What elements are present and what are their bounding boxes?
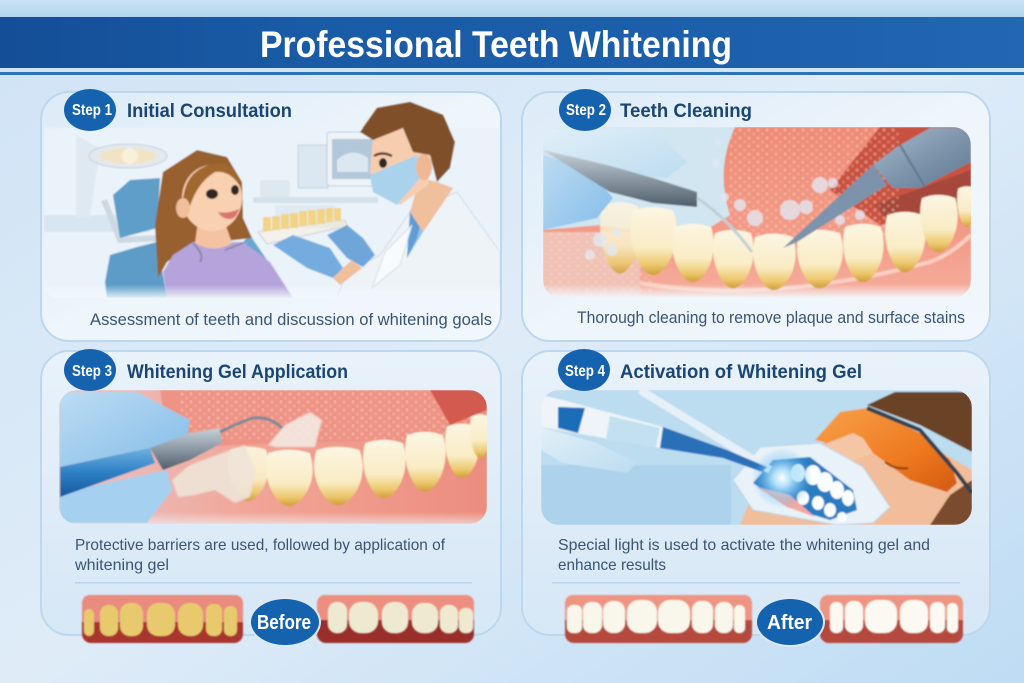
gel foam xyxy=(172,412,322,503)
step badge 2 xyxy=(559,89,611,131)
gel applicator xyxy=(60,418,282,497)
lower gum swoosh xyxy=(640,235,971,290)
heading: Initial Consultation xyxy=(127,100,292,122)
panel: step 4 activation xyxy=(522,349,990,635)
description xyxy=(74,537,446,574)
step badge 1: Step 1 xyxy=(72,102,112,119)
after badge xyxy=(755,597,825,647)
step badge 1 xyxy=(64,89,116,131)
heading: Whitening Gel Application xyxy=(127,361,348,383)
after comparison strip xyxy=(565,595,963,647)
glove xyxy=(60,392,190,523)
description: enhance results xyxy=(558,557,666,574)
description xyxy=(558,537,930,574)
orange goggles xyxy=(815,408,972,493)
title: Professional Teeth Whitening xyxy=(260,24,732,65)
illustration: gel application xyxy=(59,390,490,524)
blue light flare xyxy=(752,448,812,508)
panel: step 3 whitening gel application xyxy=(41,349,501,635)
description: Protective barriers are used, followed by application of xyxy=(75,537,446,554)
stained teeth xyxy=(228,414,490,506)
step badge 2: Step 2 xyxy=(566,102,606,119)
face xyxy=(740,441,972,525)
foam bubbles xyxy=(585,139,865,260)
heading: Teeth Cleaning xyxy=(620,100,752,122)
stained teeth xyxy=(600,186,977,290)
title banner xyxy=(0,17,1024,75)
description: whitening gel xyxy=(74,557,169,574)
heading: Activation of Whitening Gel xyxy=(620,361,862,383)
illustration: consultation xyxy=(44,102,500,299)
description: Special light is used to activate the whitening gel and xyxy=(558,537,930,554)
glove xyxy=(543,128,687,230)
step badge 4: Step 4 xyxy=(565,363,605,380)
icon: dental lamp xyxy=(89,144,167,168)
glove xyxy=(541,427,637,473)
step badge 3: Step 3 xyxy=(72,363,112,380)
before comparison strip xyxy=(82,595,474,647)
left scaler instrument xyxy=(543,150,752,252)
curing light pen xyxy=(541,390,770,472)
icon: dental chair xyxy=(101,177,267,298)
panel: step 1 initial consultation xyxy=(41,89,501,341)
illustration: cleaning xyxy=(543,127,977,298)
gloves xyxy=(273,225,375,285)
description: Thorough cleaning to remove plaque and surface stains xyxy=(577,309,965,327)
before badge: Before xyxy=(257,612,311,634)
before badge xyxy=(249,597,321,647)
background monitor and tray xyxy=(253,131,378,216)
step badge 4 xyxy=(558,349,610,391)
illustration: light activation xyxy=(541,390,972,525)
dentist xyxy=(273,102,500,298)
after badge: After xyxy=(767,612,812,634)
patient xyxy=(155,150,293,298)
step badge 3 xyxy=(64,349,116,391)
shade guide xyxy=(258,208,347,244)
right scaler instrument xyxy=(783,128,971,248)
description: Assessment of teeth and discussion of whitening goals xyxy=(90,311,492,329)
retractor and whitened teeth xyxy=(733,443,890,525)
panel: step 2 teeth cleaning xyxy=(522,89,990,341)
